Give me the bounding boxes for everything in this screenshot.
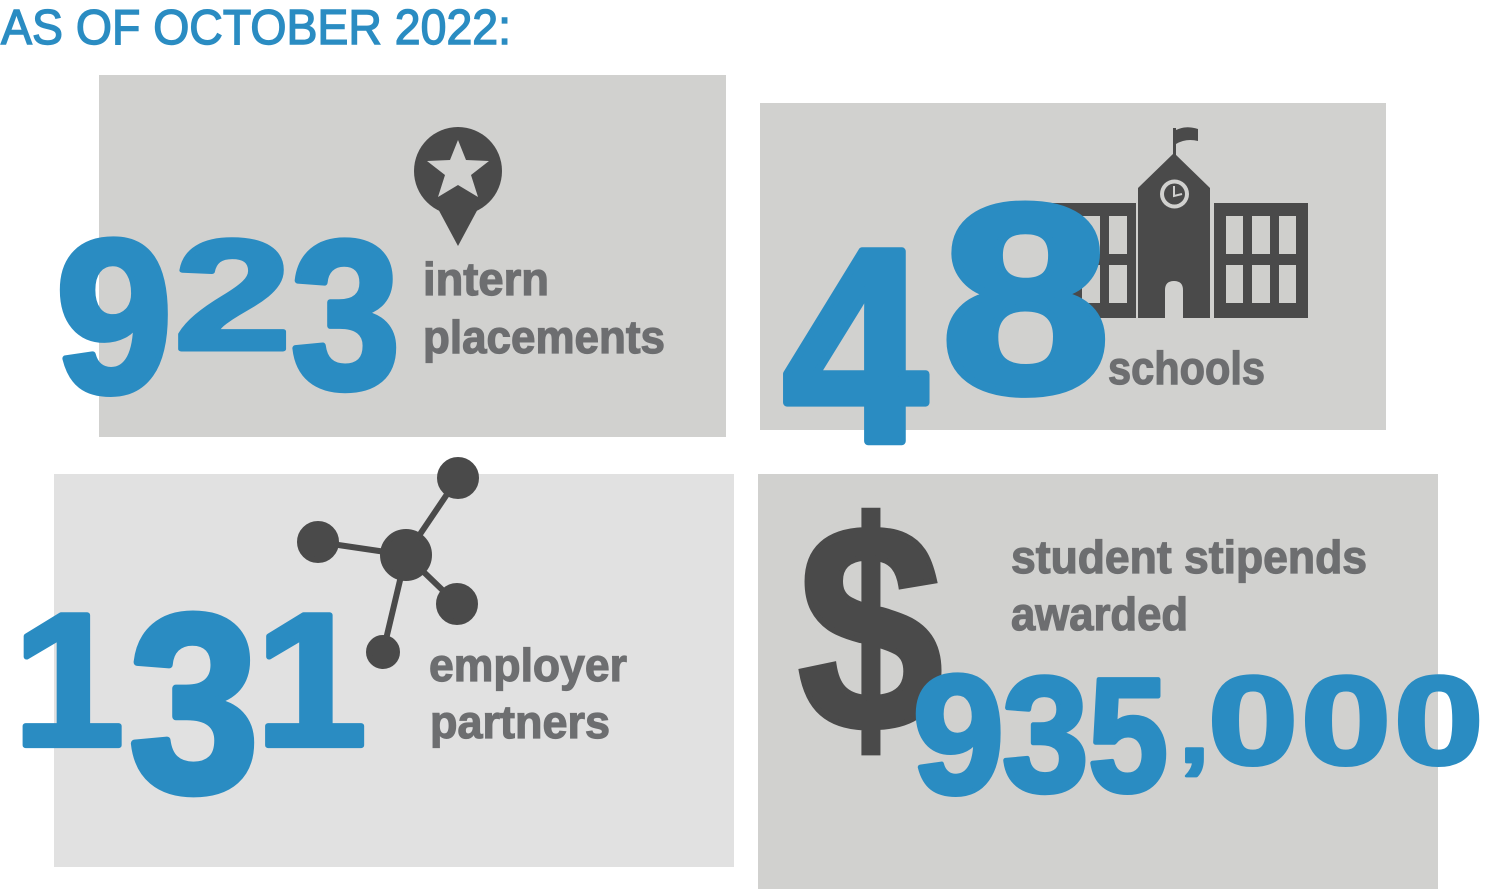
stat: 935,000: 0 bbox=[1301, 650, 1391, 791]
label: employer partners: employer bbox=[429, 639, 627, 691]
stat: 48: 8 bbox=[941, 149, 1110, 448]
label: student stipends awarded: student stipends bbox=[1011, 531, 1367, 583]
stat: 131: 1 bbox=[256, 575, 367, 786]
stat: 48: 4 bbox=[783, 192, 929, 500]
icon: school building bbox=[1050, 127, 1308, 318]
stat: 935,000: 9 bbox=[912, 641, 1004, 829]
stat: 935,000: , bbox=[1179, 681, 1210, 782]
label: intern placements: intern bbox=[423, 253, 549, 305]
stat: 923: 3 bbox=[291, 198, 400, 433]
stat: 131: 3 bbox=[129, 562, 259, 845]
panel: employer partners bbox=[13, 460, 734, 867]
stat: 935,000 bbox=[912, 641, 1483, 829]
icon: network nodes bbox=[300, 460, 476, 666]
stat: 131 bbox=[13, 562, 367, 845]
label: schools: schools bbox=[1108, 342, 1265, 394]
stat: 923: 9 bbox=[56, 195, 172, 438]
stat: 935,000: 3 bbox=[1002, 643, 1089, 826]
label: intern placements: placements bbox=[423, 311, 665, 363]
icon: dollar sign: $ bbox=[798, 464, 943, 794]
stat: 935,000: 0 bbox=[1394, 650, 1483, 791]
stat: 935,000: 0 bbox=[1208, 650, 1298, 791]
title: AS OF OCTOBER 2022: bbox=[1, 1, 511, 55]
stat: 935,000: 5 bbox=[1088, 645, 1168, 826]
stat: 48 bbox=[783, 149, 1110, 500]
panel: schools bbox=[760, 103, 1386, 500]
panel: student stipends bbox=[758, 464, 1483, 889]
panel: intern placements bbox=[56, 75, 726, 438]
label: employer partners: partners bbox=[430, 696, 610, 748]
label: student stipends awarded: awarded bbox=[1011, 588, 1188, 640]
stat: 131: 1 bbox=[13, 575, 124, 786]
icon: star map pin bbox=[414, 127, 502, 246]
stat: 923: 2 bbox=[174, 208, 291, 383]
stat: 923 bbox=[56, 195, 400, 438]
